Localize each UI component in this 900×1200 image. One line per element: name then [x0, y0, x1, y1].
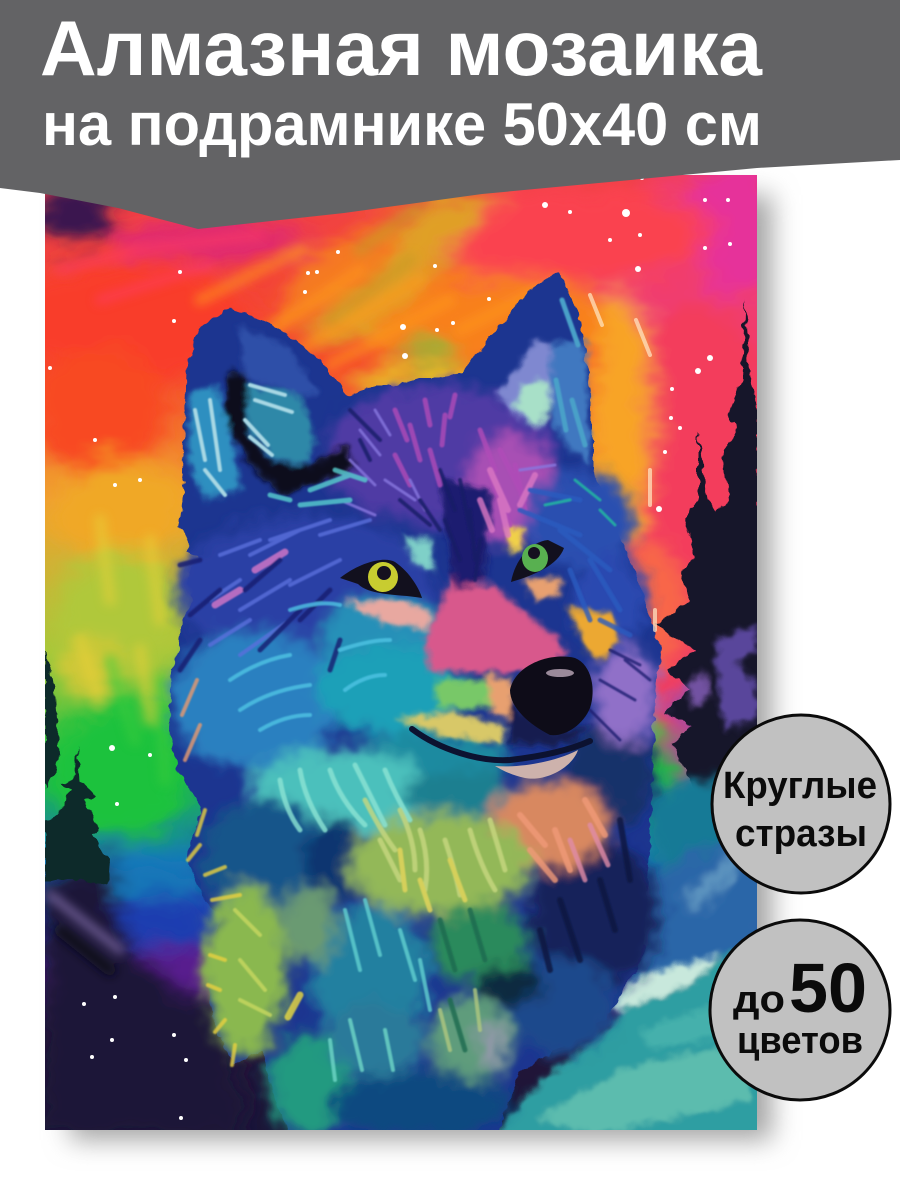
- fur strokes: [180, 395, 650, 1080]
- snow mound teal: [499, 948, 757, 1130]
- left ear black band: [225, 372, 355, 495]
- header band: [0, 0, 900, 229]
- left ear inner teal: [247, 385, 315, 465]
- right eye: [511, 540, 564, 582]
- left ear strokes: [195, 385, 292, 495]
- rocky ground: [50, 895, 120, 970]
- right ear mint patch: [515, 380, 550, 428]
- badge: round rhinestones: стразы: [735, 813, 867, 855]
- left ear upper purple: [237, 325, 320, 395]
- nose: [510, 657, 593, 735]
- wolf body and head silhouette: [170, 272, 660, 1135]
- right ear strokes: [556, 300, 585, 445]
- lower lip: [495, 750, 578, 779]
- right pine trees: [655, 300, 765, 800]
- badge: up to 50 colours: [710, 920, 890, 1100]
- right ear: [498, 340, 592, 467]
- badge: up to 50 colours: 50: [789, 949, 867, 1027]
- fur colour masses: [170, 385, 660, 1140]
- aurora sky blobs: [45, 175, 757, 1050]
- left pine trees: [45, 650, 110, 885]
- subtitle: на подрамнике 50х40 см: [42, 91, 762, 158]
- badge: up to 50 colours: цветов: [737, 1020, 863, 1062]
- painting base colour: [45, 175, 757, 1130]
- badge: up to 50 colours: до: [733, 979, 785, 1021]
- white aurora flecks: [590, 295, 655, 630]
- snow mound blue: [620, 770, 770, 1030]
- stars: [48, 176, 732, 1120]
- badge: round rhinestones: Круглые: [723, 765, 877, 807]
- left eye: [340, 560, 422, 598]
- purple light behind pines: [685, 625, 757, 730]
- painting: wolf on aurora sky: [45, 175, 757, 1130]
- right ear blue side: [550, 340, 592, 467]
- left ear: [187, 325, 355, 500]
- left ear outer blue: [187, 385, 242, 500]
- aurora brush streaks: [60, 205, 560, 780]
- mouth: [412, 729, 590, 760]
- nose highlight: [546, 669, 574, 677]
- badge: round rhinestones: [712, 715, 890, 893]
- face colour areas: [345, 480, 620, 745]
- canvas drop shadow: [70, 195, 772, 1140]
- right ear lavender inner: [498, 340, 552, 430]
- title: Алмазная мозаика: [40, 4, 763, 92]
